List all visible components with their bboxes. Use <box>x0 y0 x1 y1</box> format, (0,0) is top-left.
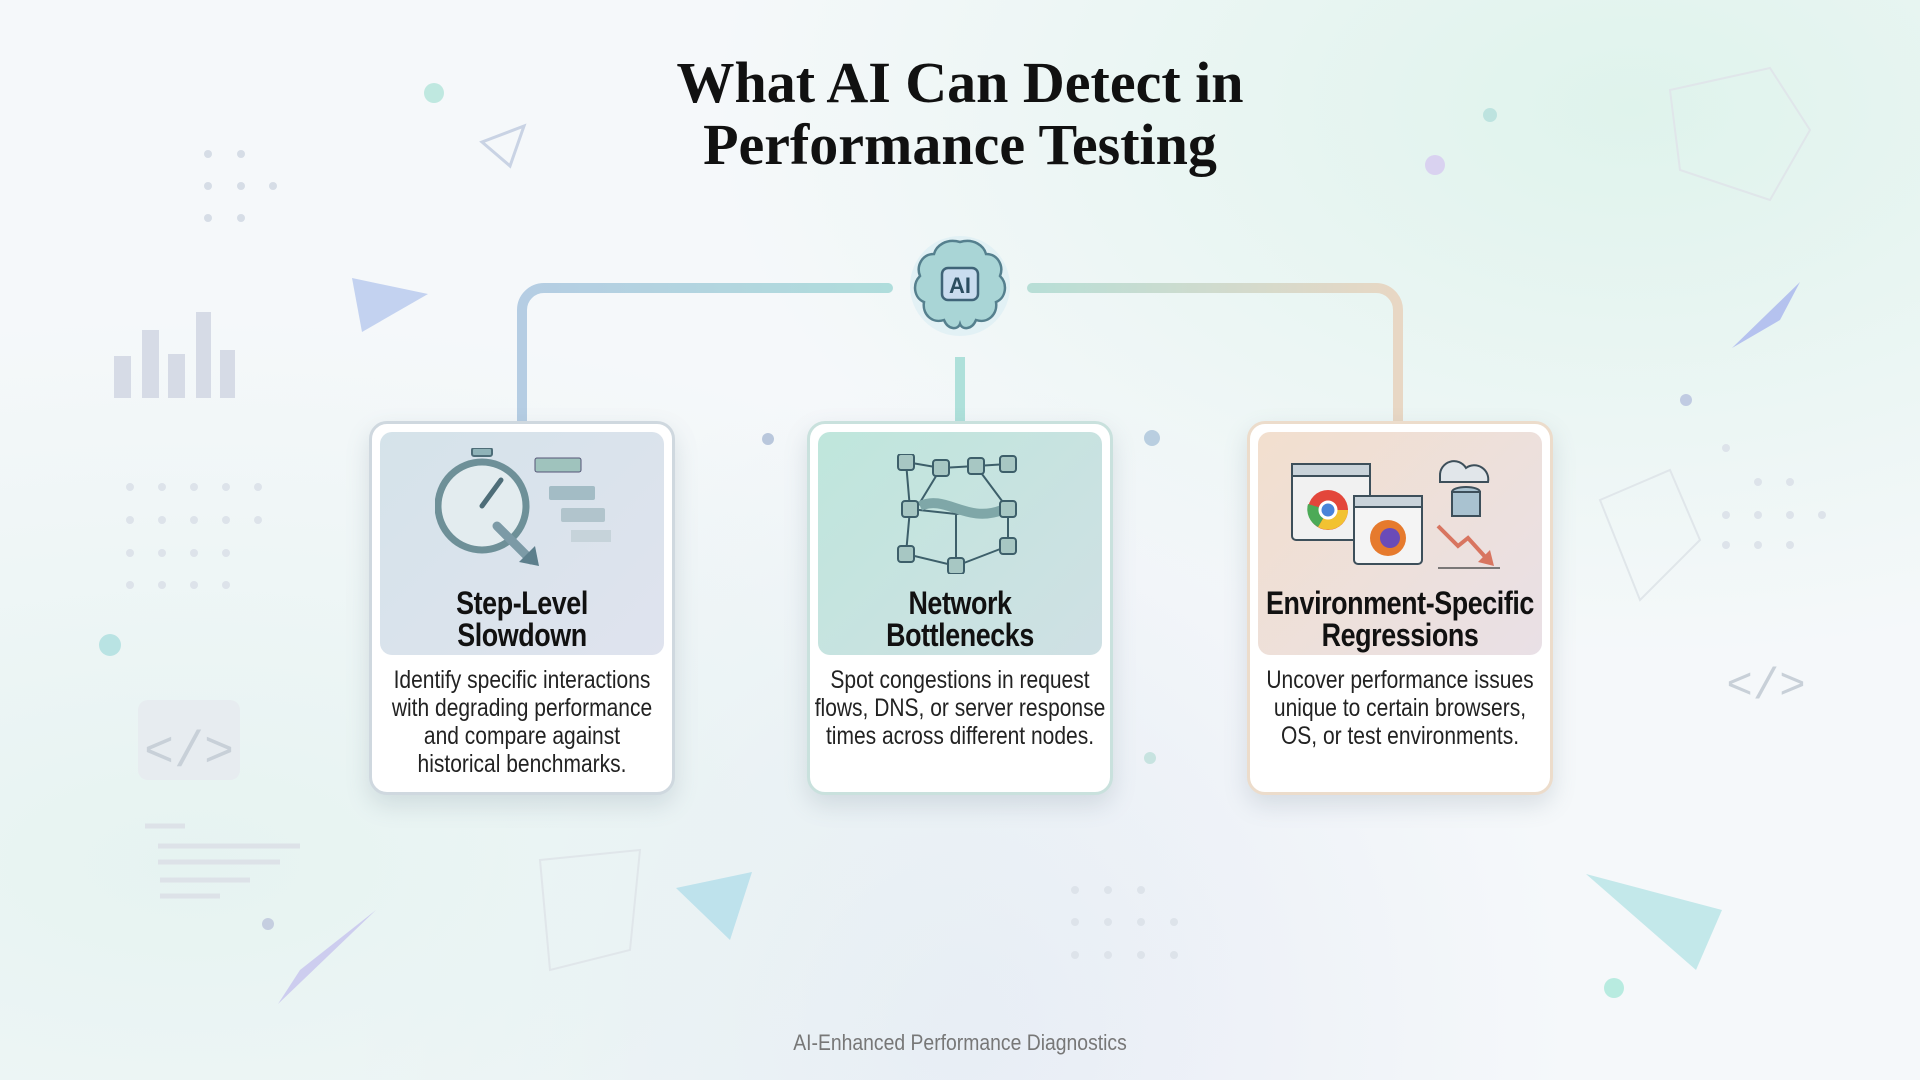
title <box>676 50 1244 177</box>
icon: AI brain: AI <box>949 273 971 298</box>
icon: AI brain <box>910 236 1010 336</box>
panel: environment-specific regressions: Regressions <box>1322 617 1478 653</box>
panel: step-level slowdown: Step-Level <box>456 585 588 621</box>
panel: environment-specific regressions: unique to certain browsers, <box>1274 694 1526 722</box>
panel: step-level slowdown: and compare against <box>424 722 620 750</box>
panel: environment-specific regressions: Environment-Specific <box>1266 585 1534 621</box>
panel: network bottlenecks: flows, DNS, or server response <box>815 694 1105 722</box>
decorative background: </> <box>1726 662 1806 712</box>
icon: network graph <box>897 454 1017 574</box>
icon: stopwatch with gantt <box>435 448 611 566</box>
panel: network bottlenecks: Bottlenecks <box>886 617 1034 653</box>
icon: browsers, database, down trend <box>1291 460 1500 569</box>
panel: network bottlenecks: Spot congestions in request <box>830 666 1090 694</box>
panel: step-level slowdown: Identify specific interactions <box>394 666 650 694</box>
panel: network bottlenecks: Network <box>908 585 1012 621</box>
footer caption: AI-Enhanced Performance Diagnostics <box>793 1030 1127 1055</box>
panel: network bottlenecks: times across different nodes. <box>826 722 1094 750</box>
title: Performance Testing <box>703 112 1217 177</box>
panel: step-level slowdown <box>369 421 675 795</box>
panel: environment-specific regressions <box>1247 421 1553 795</box>
title: What AI Can Detect in <box>676 50 1244 115</box>
panel: step-level slowdown: with degrading performance <box>392 694 652 722</box>
panel: environment-specific regressions: OS, or test environments. <box>1281 722 1519 750</box>
decorative background: </> <box>144 725 234 782</box>
panel: step-level slowdown: Slowdown <box>457 617 587 653</box>
panel: environment-specific regressions: Uncover performance issues <box>1266 666 1534 694</box>
panel: step-level slowdown: historical benchmarks. <box>418 750 626 778</box>
panel: network bottlenecks <box>807 421 1113 795</box>
